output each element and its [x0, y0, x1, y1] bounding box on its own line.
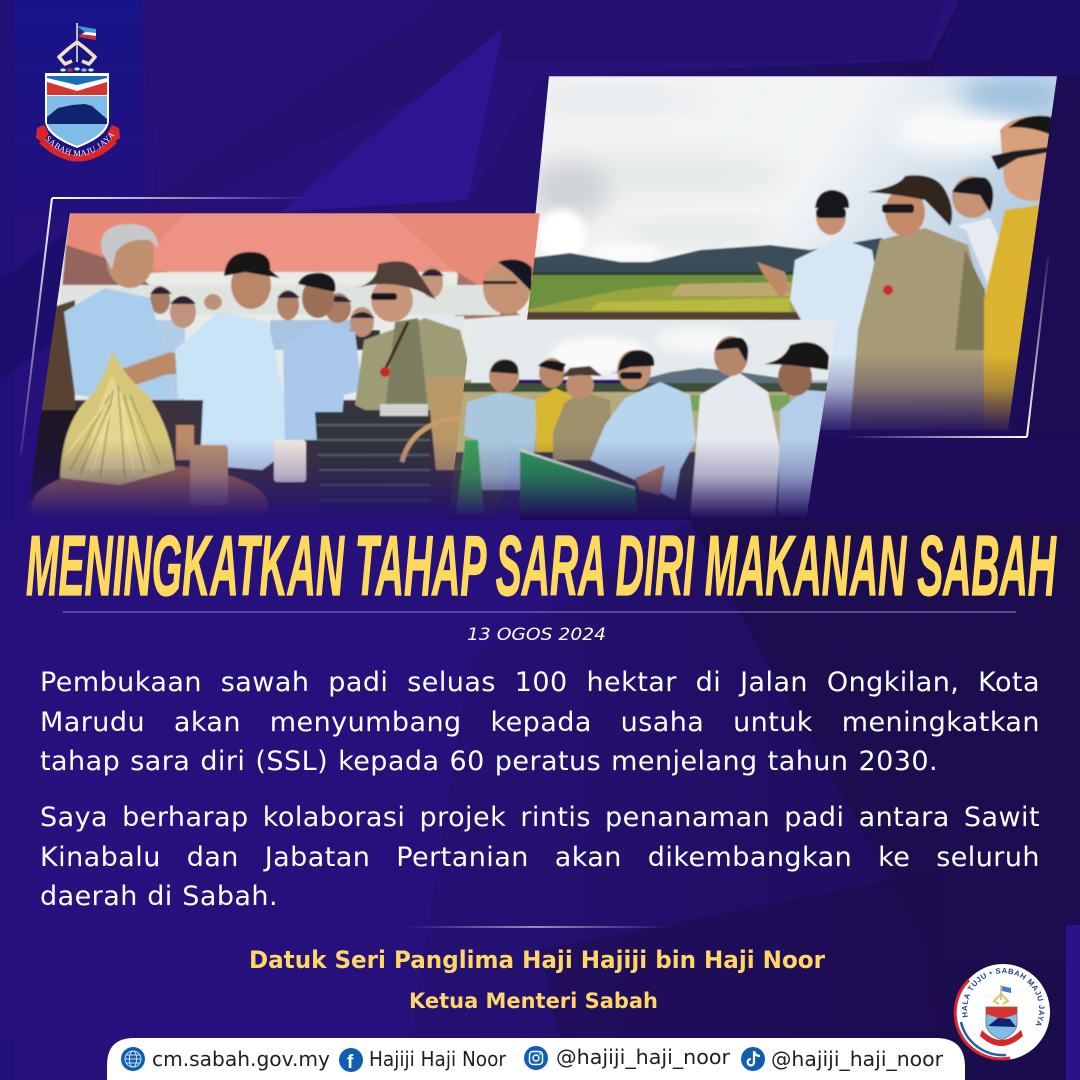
person: man in hat and vest: [553, 366, 612, 460]
icon: facebook: f: [347, 1052, 354, 1073]
person: man in light blue shirt: [456, 359, 540, 515]
photo: signing plaque: [440, 320, 840, 525]
tiktok handle: @hajiji_haji_noor: [771, 1047, 944, 1071]
person: grey-haired man: [62, 223, 178, 398]
icon: tiktok: [741, 1047, 765, 1071]
person: man in yellow shirt: [535, 358, 573, 452]
rice bundle: [60, 350, 175, 485]
body paragraph two: [40, 802, 1040, 912]
speaker role: Ketua Menteri Sabah: [409, 989, 658, 1013]
icon: shield: [45, 73, 109, 148]
photo: field visit with mountains: [520, 76, 1060, 440]
person: man in white shirt: [952, 176, 1000, 290]
contact bar: [107, 1038, 965, 1080]
instagram handle: @hajiji_haji_noor: [556, 1045, 731, 1069]
photo: rice display under tent: [28, 213, 540, 514]
clay bowl and jars: [32, 439, 308, 513]
icon: clasped hands: [59, 42, 95, 64]
person: man in cap pointing: [757, 190, 885, 430]
person: chief minister in cap: [175, 252, 287, 470]
website: cm.sabah.gov.my: [152, 1047, 330, 1071]
body paragraph two: Kinabalu dan Jabatan Pertanian akan dikembangkan ke seluruh: [40, 842, 1040, 873]
black woven basket: [314, 403, 431, 501]
body paragraph two: daerah di Sabah.: [40, 881, 278, 912]
speaker name: Datuk Seri Panglima Haji Hajiji bin Haji Noor: [249, 946, 825, 974]
green draped plaque: [519, 450, 637, 513]
small bamboo basket: [425, 377, 469, 470]
logo: Sabah coat of arms: [36, 23, 120, 162]
facebook name: Hajiji Haji Noor: [369, 1047, 507, 1071]
icon: wreath: [60, 67, 94, 72]
body paragraph two: Saya berharap kolaborasi projek rintis penanaman padi antara Sawit: [40, 802, 1040, 833]
photo frame lines: [21, 198, 1048, 454]
person: man in hat and khaki vest: [355, 261, 472, 410]
person: man with glasses at right: [483, 260, 532, 314]
icon: facebook: [339, 1048, 363, 1073]
person: chief minister signing: [590, 350, 696, 500]
crowd: [145, 266, 464, 400]
person: man in blue shirt and cap: [283, 273, 362, 440]
icon: instagram: [524, 1046, 548, 1070]
person: man in black cap: [764, 342, 832, 520]
date: 13 OGOS 2024: [467, 625, 606, 645]
icon: website globe: [121, 1047, 145, 1071]
body paragraph one: Marudu akan menyumbang kepada usaha untuk meningkatkan: [40, 707, 1040, 738]
person: man in brown hat and vest: [850, 175, 985, 430]
body paragraph one: Pembukaan sawah padi seluas 100 hektar di Jalan Ongkilan, Kota: [40, 667, 1040, 698]
body paragraph one: [40, 667, 1040, 777]
badge: Hala Tuju Sabah Maju Jaya: HALA TUJU • SABAH MAJU JAYA: [962, 968, 1044, 1026]
person: man in yellow shirt: [984, 116, 1052, 430]
badge: Hala Tuju Sabah Maju Jaya: [954, 964, 1050, 1060]
icon: ribbon: SABAH MAJU JAYA: [45, 133, 115, 156]
person: man in white shirt: [690, 336, 780, 520]
icon: flag: [77, 23, 96, 62]
body paragraph one: tahap sara diri (SSL) kepada 60 peratus menjelang tahun 2030.: [40, 746, 938, 777]
